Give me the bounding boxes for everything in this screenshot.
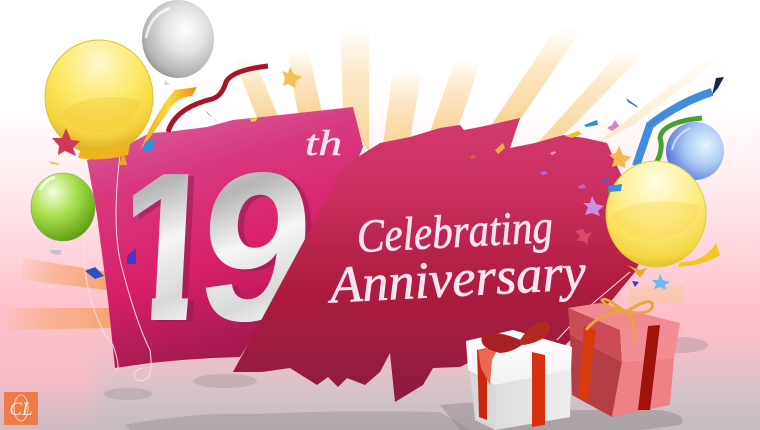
panel: right torn crimson sheet bbox=[233, 118, 650, 402]
yellow balloon left bbox=[45, 40, 153, 165]
star: gold right bbox=[609, 146, 631, 168]
logo: CL badge: CL bbox=[9, 399, 33, 420]
red ribbon left bbox=[168, 66, 268, 132]
gold ribbon left bbox=[140, 87, 197, 150]
headline: Celebrating Anniversary: Celebrating bbox=[356, 201, 554, 263]
star: gold top bbox=[282, 67, 302, 88]
confetti and stars bbox=[48, 98, 670, 290]
ribbon green right bbox=[608, 118, 702, 192]
gift: white box bbox=[466, 321, 572, 430]
number 19: 9 bbox=[188, 128, 324, 365]
floor shadows bbox=[104, 337, 708, 430]
number 19 bbox=[133, 172, 312, 324]
gift: pink box bbox=[568, 299, 680, 417]
headline: Celebrating Anniversary: Anniversary bbox=[326, 244, 588, 315]
green balloon bbox=[31, 173, 95, 241]
number 19: 9 bbox=[194, 130, 330, 367]
balloon blue bbox=[666, 122, 724, 180]
ribbon blue right bbox=[636, 77, 724, 166]
headline: Celebrating Anniversary bbox=[326, 201, 588, 315]
silver balloon bbox=[142, 0, 214, 85]
star: red left bbox=[52, 128, 80, 156]
panel: left torn pink sheet bbox=[87, 107, 363, 368]
logo: CL badge bbox=[4, 392, 38, 425]
balloon strings bbox=[84, 155, 630, 381]
number 19: 1 bbox=[114, 130, 232, 367]
yellow balloon right bbox=[606, 161, 720, 278]
ordinal suffix: th bbox=[305, 123, 342, 163]
number 19: 1 bbox=[108, 128, 226, 365]
sunburst rays bbox=[7, 27, 723, 330]
